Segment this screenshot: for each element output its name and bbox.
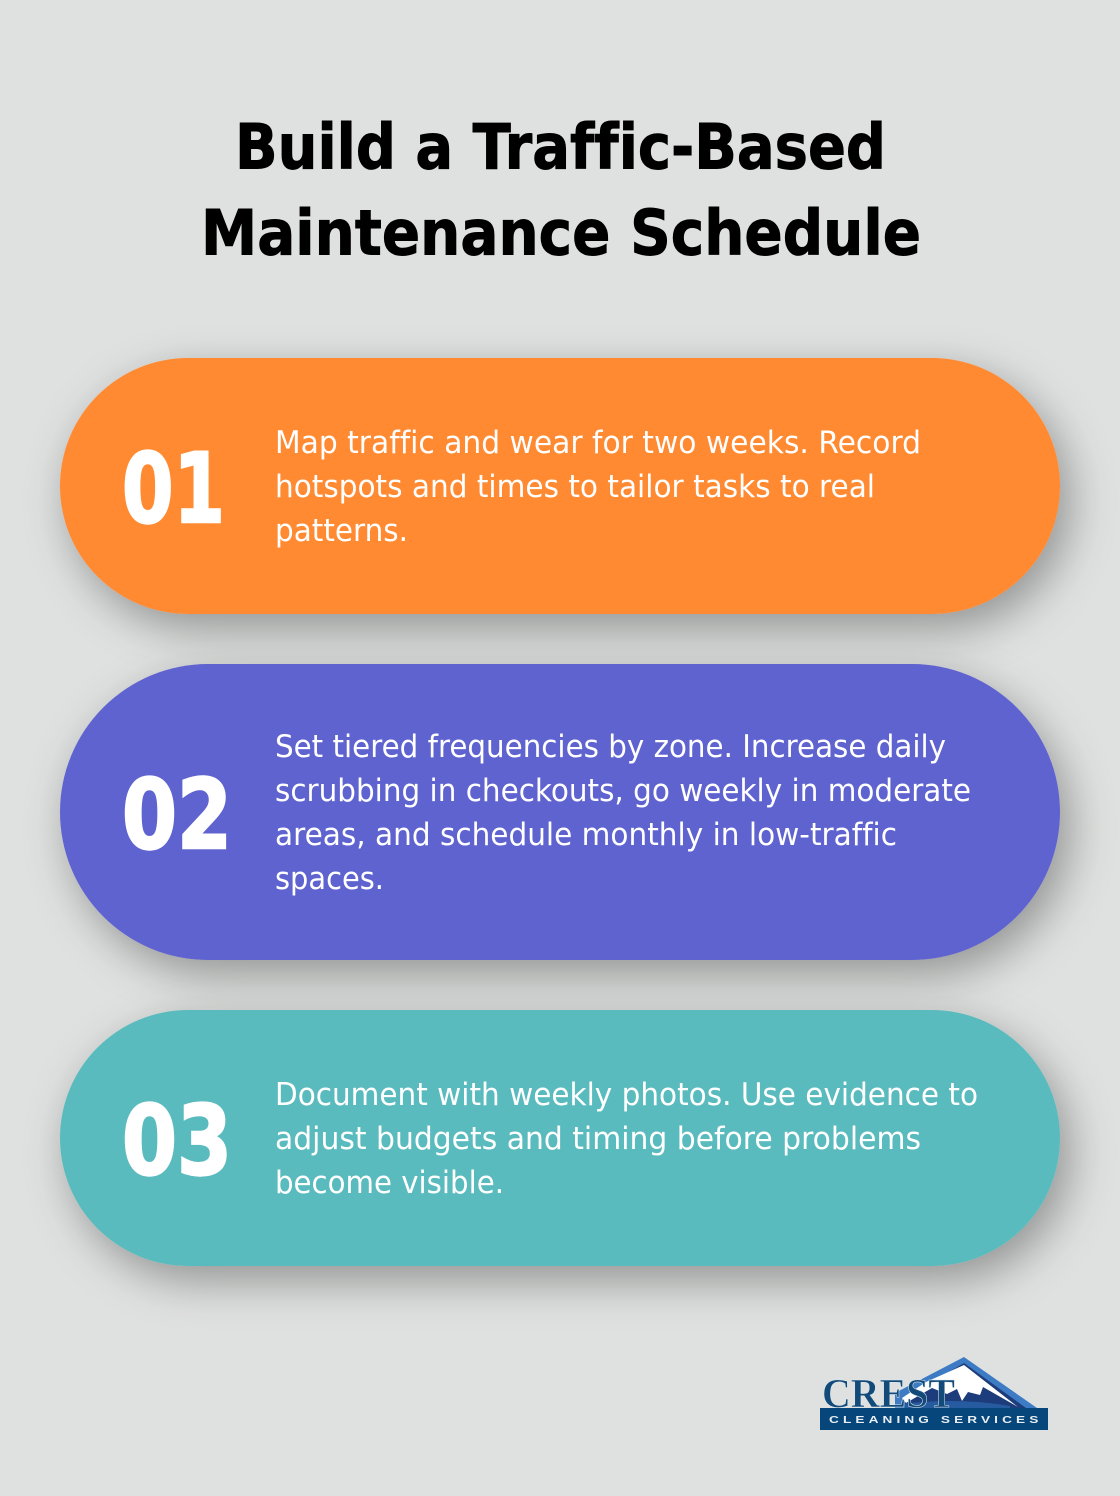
- logo banner: CLEANING SERVICES: [829, 1414, 1038, 1426]
- text: step 02 description: spaces.: [275, 861, 384, 897]
- text: step 01 description: [275, 425, 921, 549]
- title: [201, 110, 921, 270]
- logo: Crest Cleaning Services: [820, 1357, 1048, 1430]
- logo banner: [820, 1408, 1048, 1430]
- logo wordmark: CREST: CREST: [822, 1370, 955, 1416]
- title: Maintenance Schedule: [201, 196, 921, 270]
- text: step 02 description: [275, 729, 971, 897]
- orange pill background: [60, 358, 1060, 614]
- text: step 02 description: Set tiered frequencies by zone. Increase daily: [275, 729, 946, 765]
- text: step 01 description: Map traffic and wear for two weeks. Record: [275, 425, 921, 461]
- panel: step 01: [60, 358, 1060, 614]
- purple pill background: [60, 664, 1060, 960]
- panel: step 02: [60, 664, 1060, 960]
- text: step 03 description: become visible.: [275, 1165, 504, 1201]
- text: step 03 description: [275, 1077, 978, 1201]
- text: step 02 description: scrubbing in checkouts, go weekly in moderate: [275, 773, 971, 809]
- teal pill background: [60, 1010, 1060, 1266]
- panel: step 03: [60, 1010, 1060, 1266]
- number 02: 02: [122, 759, 232, 871]
- icon: mountain: [895, 1357, 1037, 1408]
- number 03: 03: [122, 1085, 232, 1197]
- text: step 03 description: Document with weekly photos. Use evidence to: [275, 1077, 978, 1113]
- text: step 01 description: hotspots and times to tailor tasks to real: [275, 469, 875, 505]
- text: step 03 description: adjust budgets and timing before problems: [275, 1121, 921, 1157]
- text: step 02 description: areas, and schedule monthly in low-traffic: [275, 817, 897, 853]
- title: Build a Traffic-Based: [235, 110, 886, 184]
- number 01: 01: [122, 433, 225, 545]
- text: step 01 description: patterns.: [275, 513, 408, 549]
